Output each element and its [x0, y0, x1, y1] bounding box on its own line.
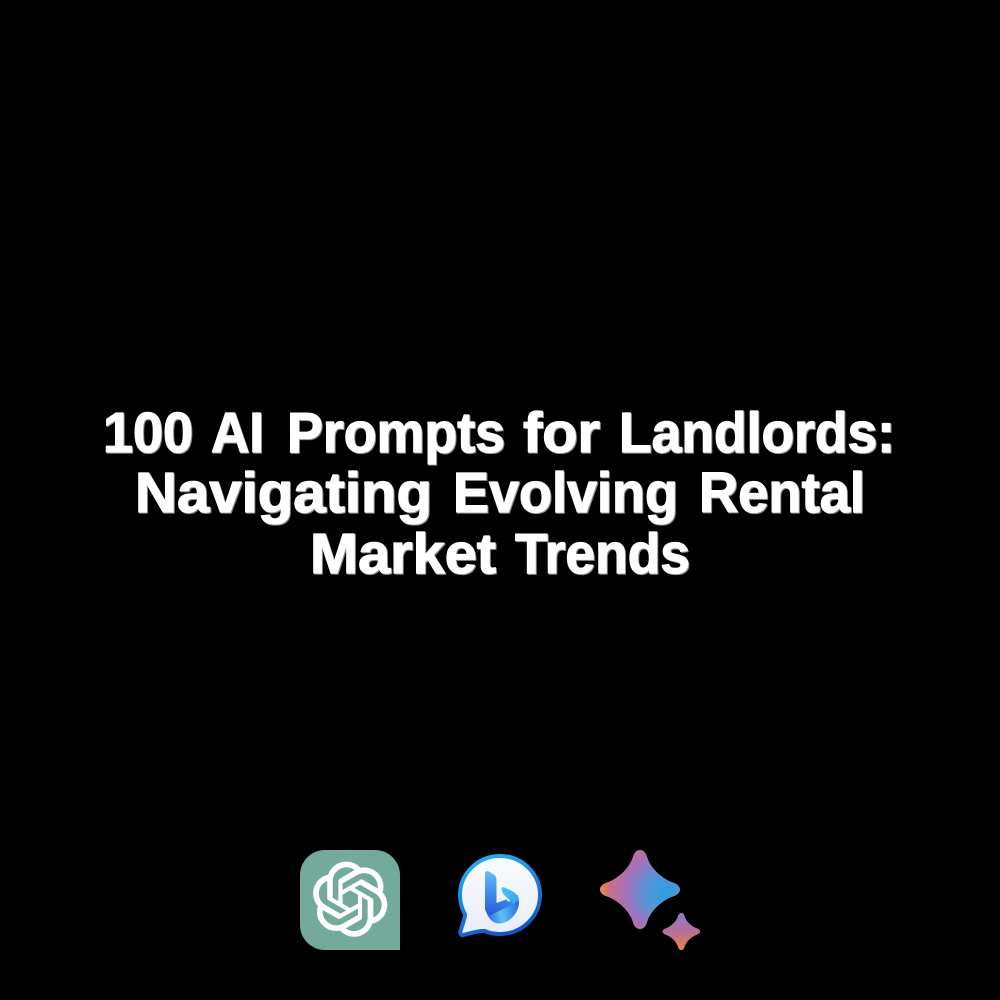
icon: Bing b stem	[485, 871, 496, 916]
icon: Bing b top lobe	[501, 887, 519, 904]
title: for	[523, 401, 600, 465]
title: Rental	[699, 461, 865, 525]
title: Prompts	[287, 401, 505, 465]
title: AI	[211, 401, 264, 465]
icon: Gemini sparkles	[600, 850, 700, 950]
icon: Bing chat logo	[460, 856, 540, 935]
icon: Bing b lower ribbon	[485, 895, 519, 924]
title: Landlords:	[619, 401, 895, 465]
title: Trends	[515, 522, 690, 586]
title: Market	[310, 522, 496, 586]
icon: small sparkle	[662, 913, 700, 950]
title	[103, 401, 895, 586]
icon: large sparkle	[600, 850, 680, 929]
icon: Bing b middle ribbon	[490, 900, 512, 916]
title: 100	[103, 401, 193, 465]
title: Evolving	[453, 461, 678, 525]
title: Navigating	[135, 461, 432, 525]
icon: ChatGPT logo	[300, 850, 400, 950]
